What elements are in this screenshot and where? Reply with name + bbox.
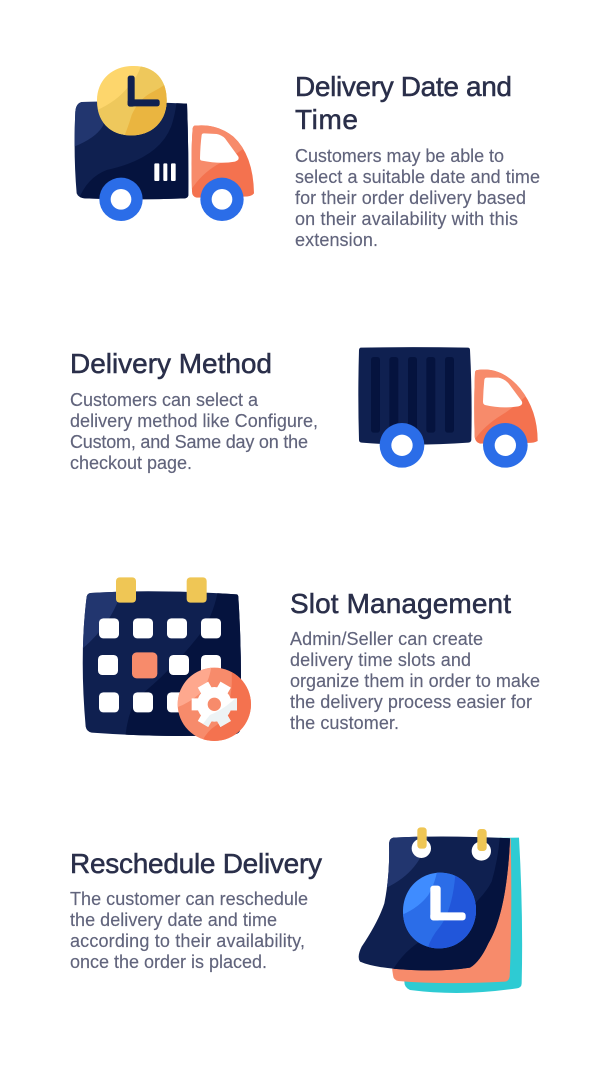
description: slot management [290, 629, 540, 733]
icon: calendar with stacked pages and clock [359, 827, 522, 993]
icon: delivery truck [358, 347, 538, 468]
description: delivery method: Customers can select a [70, 390, 259, 410]
panel: delivery method [70, 347, 538, 473]
date cells [98, 618, 221, 712]
gear badge [178, 668, 251, 741]
heading: reschedule delivery: Reschedule Delivery [70, 848, 322, 879]
description: slot management: the customer. [290, 713, 399, 733]
truck cargo box [74, 102, 188, 200]
panel: delivery date and time [70, 63, 540, 250]
description: delivery method: delivery method like Configure, [70, 411, 318, 431]
panel: reschedule delivery [70, 827, 522, 993]
description: slot management: delivery time slots and [290, 650, 471, 670]
heading: delivery method: Delivery Method [70, 348, 272, 379]
calendar page [82, 591, 241, 736]
description: reschedule delivery: once the order is placed. [70, 952, 267, 972]
icon: truck with clock [70, 63, 254, 221]
heading: delivery date and time [295, 71, 512, 135]
truck cab [474, 370, 538, 444]
description: slot management: Admin/Seller can create [290, 629, 483, 649]
navy front page [359, 835, 515, 975]
heading: delivery date and time: Time [295, 104, 358, 135]
description: delivery date and time: on their availability with this [295, 209, 518, 229]
description: delivery date and time: extension. [295, 230, 378, 250]
heading: delivery date and time: Delivery Date and [295, 71, 512, 102]
heading: slot management: Slot Management [290, 588, 511, 619]
panel: slot management [77, 577, 540, 748]
description: delivery date and time: Customers may be able to [295, 146, 504, 166]
cargo box with slots [358, 347, 472, 445]
icon: calendar with gear [82, 577, 251, 741]
description: delivery date and time: select a suitable date and time [295, 167, 540, 187]
coral middle page [392, 838, 511, 983]
clock [97, 66, 167, 136]
binder rings [412, 827, 491, 861]
truck cab [191, 125, 254, 198]
description: slot management: the delivery process easier for [290, 692, 532, 712]
binder tabs [116, 577, 207, 603]
teal back page [404, 838, 522, 993]
description: reschedule delivery: the delivery date and time [70, 910, 277, 930]
description: delivery method [70, 390, 318, 473]
blue clock [403, 872, 476, 948]
description: reschedule delivery: The customer can reschedule [70, 889, 308, 909]
description: reschedule delivery [70, 889, 308, 972]
description: delivery date and time: for their order delivery based [295, 188, 526, 208]
description: delivery method: checkout page. [70, 453, 192, 473]
description: slot management: organize them in order to make [290, 671, 540, 691]
wheels [380, 423, 528, 468]
description: delivery date and time [295, 146, 540, 250]
description: reschedule delivery: according to their availability, [70, 931, 305, 951]
description: delivery method: Custom, and Same day on the [70, 432, 308, 452]
wheels [99, 178, 244, 221]
